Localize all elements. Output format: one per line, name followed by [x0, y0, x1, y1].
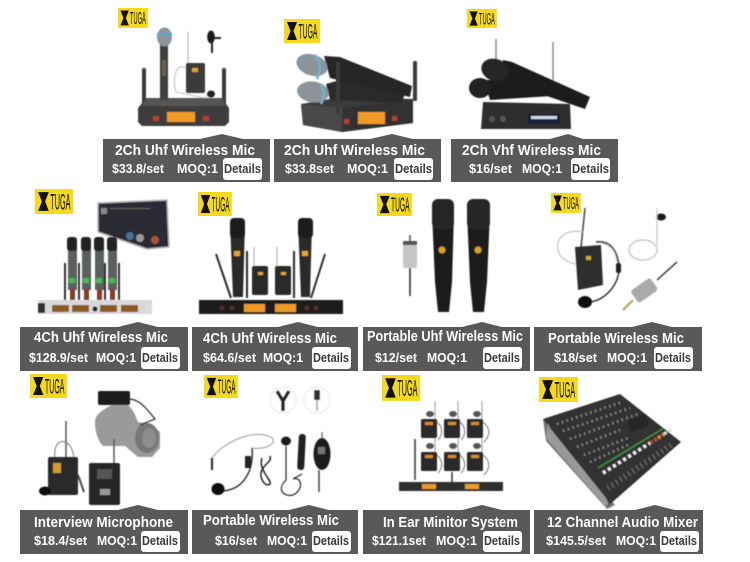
- product name: Portable Wireless Mic: [548, 331, 684, 347]
- product name: 12 Channel Audio Mixer: [547, 515, 698, 531]
- product card: 4Ch Uhf Wireless Mic with beltpacks: [192, 192, 358, 371]
- details button: [312, 347, 351, 369]
- MOQ: MOQ:1: [427, 351, 467, 365]
- price: $33.8set: [285, 162, 335, 176]
- logo: XTUGA: [204, 375, 238, 399]
- details button: [654, 347, 693, 369]
- product image: headset, lavalier, transmitter, adapters: [212, 387, 330, 495]
- details button: [394, 158, 433, 180]
- label panel: [192, 505, 358, 554]
- product card: 12 Channel Audio Mixer: TUGA: [555, 378, 575, 402]
- label panel: [103, 134, 270, 182]
- product name: 4Ch Uhf Wireless Mic: [203, 331, 337, 347]
- product card: 2Ch Uhf Wireless Mic B: TUGA: [298, 20, 318, 44]
- price: $145.5/set: [546, 534, 607, 548]
- product card: Interview Microphone: [20, 374, 188, 554]
- product card: 2Ch Vhf Wireless Mic: TUGA: [479, 10, 495, 28]
- MOQ: MOQ:1: [522, 162, 562, 176]
- label panel: [451, 134, 618, 182]
- product card: 4Ch Uhf Wireless Mic with case: TUGA: [50, 189, 71, 214]
- details button: [571, 158, 610, 180]
- details button: Details: [224, 162, 261, 176]
- product name: 4Ch Uhf Wireless Mic: [34, 330, 168, 346]
- product card: Portable Uhf Wireless Mic: TUGA: [391, 195, 410, 217]
- price: $12/set: [375, 351, 418, 365]
- logo: XTUGA: [198, 192, 232, 217]
- product card: In Ear Monitor System: TUGA: [397, 376, 418, 401]
- product card: In Ear Monitor System: [363, 375, 530, 554]
- price: $33.8/set: [112, 162, 165, 176]
- details button: [312, 531, 351, 552]
- product image: receiver with mic and headset: [138, 28, 229, 126]
- MOQ: MOQ:1: [436, 534, 477, 548]
- MOQ: MOQ:1: [96, 351, 136, 365]
- product card: Interview Microphone: TUGA: [45, 375, 65, 398]
- product image: VHF receiver with two mics: [469, 39, 590, 129]
- MOQ: MOQ:1: [607, 351, 647, 365]
- logo: XTUGA: [382, 375, 420, 401]
- details button: Details: [395, 162, 432, 176]
- MOQ: MOQ:1: [347, 162, 388, 176]
- label panel: [534, 505, 703, 554]
- product image: beltpack, headset, lavalier, mini transmitter: [558, 208, 677, 310]
- product card: 2Ch Uhf Wireless Mic A: [103, 8, 270, 182]
- details button: Details: [572, 162, 609, 176]
- MOQ: MOQ:1: [97, 534, 137, 548]
- product image: two handheld mics and transmitter: [403, 199, 490, 312]
- product card: Portable Wireless Mic with headset: [534, 193, 702, 371]
- product card: Portable Uhf Wireless Mic: [363, 193, 530, 371]
- label panel: [534, 322, 702, 371]
- price: $16/set: [469, 162, 513, 176]
- logo: XTUGA: [539, 377, 578, 402]
- product card: 2Ch Uhf Wireless Mic A: TUGA: [130, 8, 146, 28]
- price: $64.6/set: [203, 351, 257, 365]
- product name: In Ear Minitor System: [383, 515, 518, 531]
- product image: audio mixer: [543, 394, 681, 509]
- product name: 2Ch Vhf Wireless Mic: [462, 143, 601, 159]
- product card: 4Ch Uhf Wireless Mic with case: [20, 189, 188, 371]
- details button: Details: [142, 351, 178, 365]
- logo: XTUGA: [35, 189, 73, 214]
- product image: receiver with two mics: [294, 50, 417, 132]
- price: $18.4/set: [34, 534, 88, 548]
- MOQ: MOQ:1: [177, 162, 218, 176]
- label panel: [192, 322, 358, 371]
- label panel: [363, 322, 530, 371]
- details button: Details: [484, 351, 520, 365]
- price: $121.1set: [372, 534, 427, 548]
- details button: Details: [661, 534, 697, 548]
- product name: Portable Uhf Wireless Mic: [367, 329, 523, 345]
- details button: [223, 158, 262, 180]
- product card: 12 Channel Audio Mixer: [534, 377, 703, 554]
- logo: XTUGA: [551, 193, 581, 213]
- label panel: [274, 134, 441, 182]
- details button: [141, 347, 180, 369]
- product name: 2Ch Uhf Wireless Mic: [115, 143, 255, 159]
- product image: camera with receiver and beltpacks: [39, 391, 160, 505]
- product card: Portable Wireless Mic with adapters: TUGA: [218, 377, 236, 399]
- product card: 4Ch Uhf Wireless Mic with beltpacks: TUGA: [212, 194, 230, 217]
- MOQ: MOQ:1: [616, 534, 656, 548]
- price: $128.9/set: [29, 351, 89, 365]
- label panel: [20, 505, 188, 554]
- details button: Details: [655, 351, 691, 365]
- MOQ: MOQ:1: [263, 351, 303, 365]
- details button: [483, 531, 522, 552]
- product image: rack units and six bodypacks: [399, 401, 503, 491]
- product card: Portable Wireless Mic with adapters: [192, 375, 358, 554]
- logo: XTUGA: [467, 9, 497, 28]
- price: $18/set: [554, 351, 598, 365]
- price: $16/set: [215, 534, 258, 548]
- label panel: [363, 505, 530, 554]
- product name: 2Ch Uhf Wireless Mic: [284, 143, 425, 159]
- label panel: [20, 322, 188, 371]
- details button: [483, 347, 522, 369]
- details button: Details: [142, 534, 178, 548]
- details button: Details: [484, 534, 520, 548]
- logo: XTUGA: [118, 8, 148, 28]
- product image: four mics, rack receiver and case: [38, 200, 169, 314]
- product card: 2Ch Uhf Wireless Mic B: [274, 19, 441, 182]
- product image: rack receiver, two mics and two beltpacks: [199, 218, 343, 314]
- details button: [660, 531, 699, 552]
- details button: Details: [313, 534, 349, 548]
- product card: 2Ch Vhf Wireless Mic: [451, 9, 618, 182]
- details button: Details: [313, 351, 349, 365]
- product name: Portable Wireless Mic: [203, 513, 339, 529]
- logo: XTUGA: [284, 19, 320, 44]
- product card: Portable Wireless Mic with headset: TUGA: [563, 193, 579, 213]
- details button: [141, 531, 180, 552]
- logo: XTUGA: [30, 374, 67, 398]
- logo: XTUGA: [377, 193, 412, 217]
- product name: Interview Microphone: [34, 515, 173, 531]
- MOQ: MOQ:1: [267, 534, 307, 548]
